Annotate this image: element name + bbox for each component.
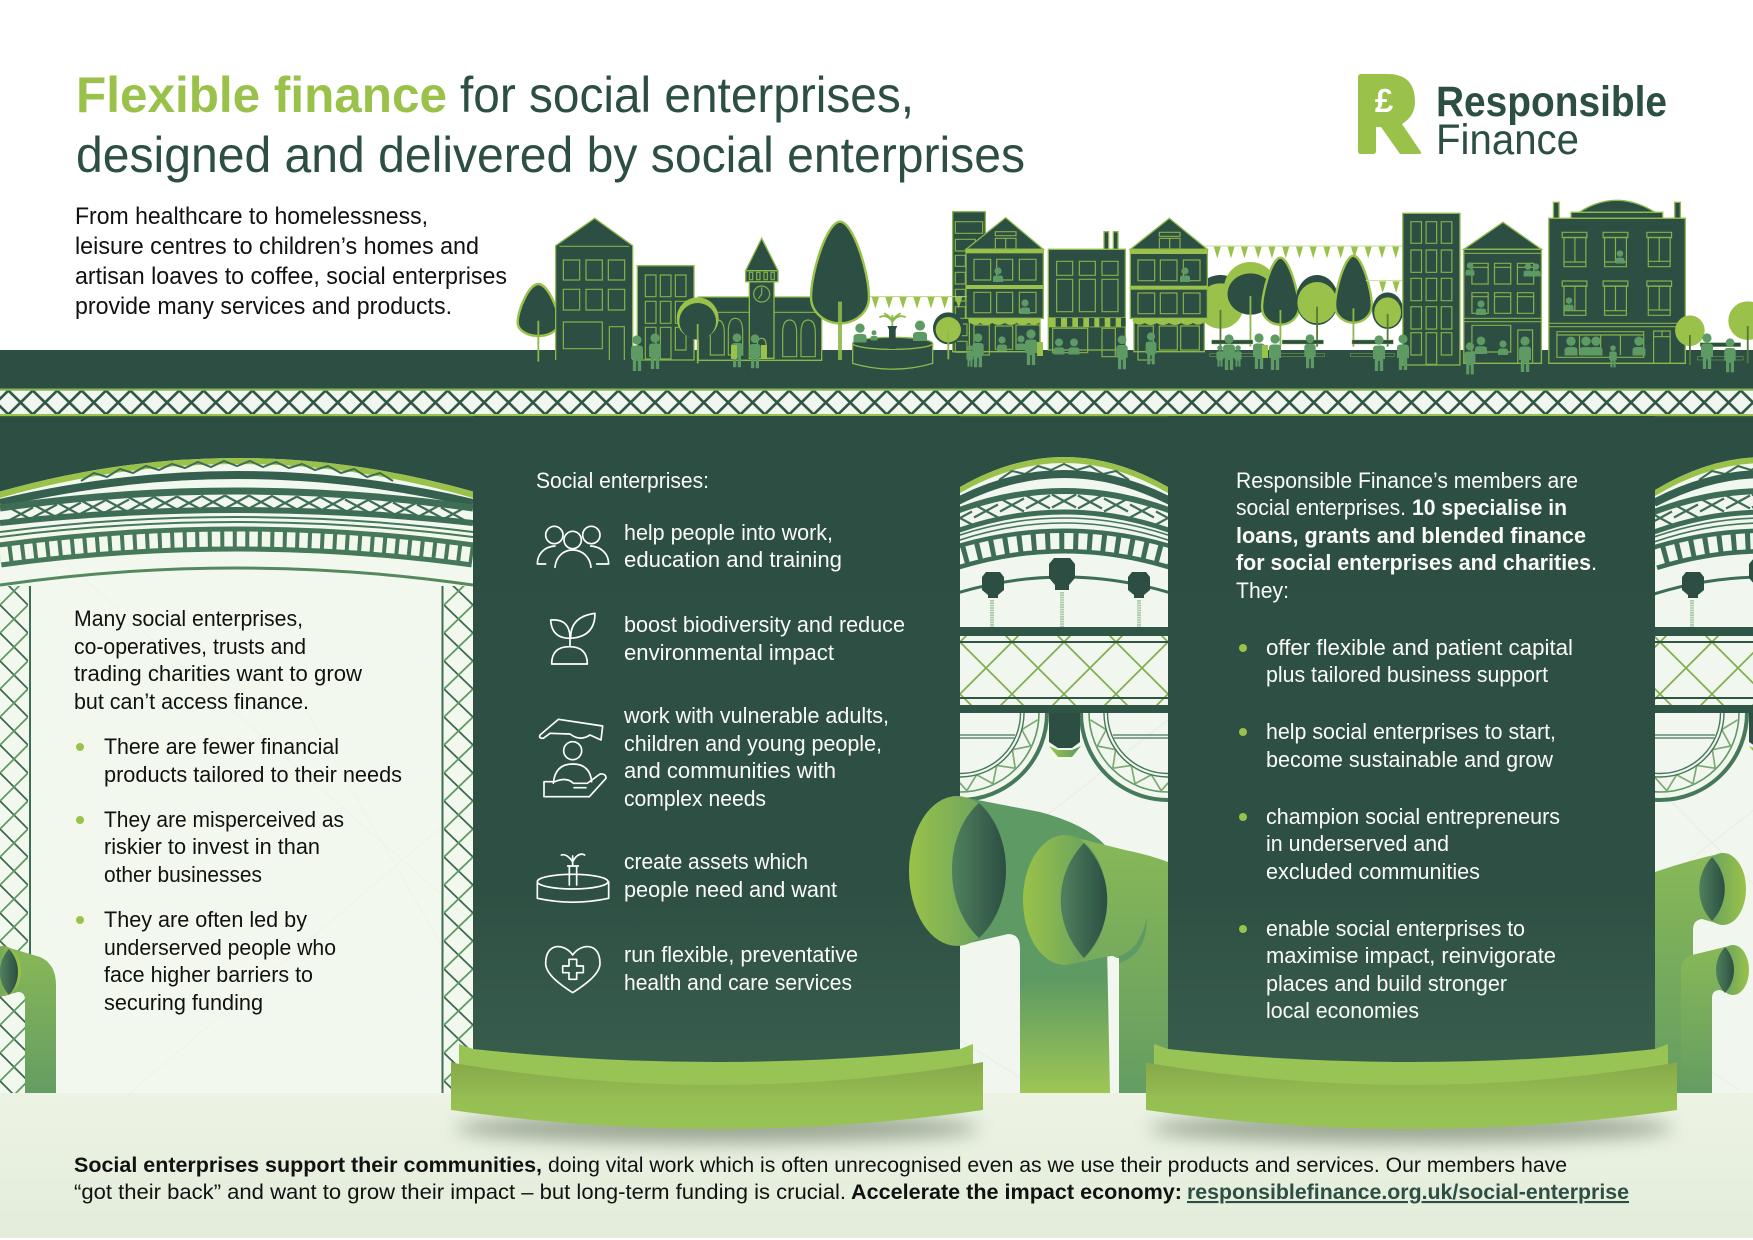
plinth: right column — [1146, 1044, 1677, 1143]
list item: assets: people need and want — [624, 877, 837, 902]
bullet list: barriers: There are fewer financial — [104, 734, 339, 759]
lattice frieze band — [0, 388, 1753, 416]
footer text: Accelerate the impact economy: — [851, 1181, 1182, 1204]
list item: work and training: help people into work, — [624, 520, 833, 545]
tall block — [1403, 213, 1460, 365]
house with shopfront right — [1130, 218, 1207, 360]
text block: members intro: . — [1591, 550, 1597, 575]
text block: members intro: loans, grants and blended finance — [1236, 523, 1586, 548]
text block: members intro: social enterprises. — [1236, 495, 1406, 520]
intro text: provide many services and products. — [75, 293, 452, 320]
text block: members intro: 10 specialise in — [1412, 495, 1567, 520]
intro text: leisure centres to children’s homes and — [75, 233, 479, 260]
panel: middle arch structure — [960, 457, 1168, 1093]
bullet list: barriers: products tailored to their needs — [104, 762, 402, 787]
list item: vulnerable people: work with vulnerable adults, — [623, 703, 889, 728]
bullet list: what members do: excluded communities — [1266, 859, 1480, 884]
dark ground and body background — [0, 350, 1753, 1093]
logo: Responsible Finance: £ — [1375, 82, 1394, 119]
town people — [631, 250, 1736, 374]
list item: biodiversity: environmental impact — [624, 640, 834, 665]
lattice column right — [444, 586, 473, 1093]
icon: periscope pipe at left edge — [0, 946, 56, 1093]
town illustration: bunting and tree by fountain — [870, 297, 967, 359]
title: designed and delivered by social enterprises — [76, 127, 1025, 183]
benches — [1210, 340, 1743, 360]
intro text: From healthcare to homelessness, — [75, 203, 428, 230]
list item: biodiversity: boost biodiversity and reduce — [624, 612, 905, 637]
list item: work and training: education and training — [624, 547, 842, 572]
lattice column left — [0, 586, 28, 1093]
title: for social enterprises, — [460, 67, 914, 123]
text block: members intro — [1236, 468, 1597, 603]
tall block behind houses — [953, 212, 985, 352]
icon: periscope pipes at right edge — [1655, 853, 1749, 1093]
bullet list: what members do: places and build stronger — [1266, 971, 1507, 996]
intro text: artisan loaves to coffee, social enterprises — [75, 263, 507, 290]
text block: social enterprises list heading: Social enterprises: — [536, 468, 709, 493]
text block: members intro: Responsible Finance’s members are — [1236, 468, 1578, 493]
bullet list: what members do: plus tailored business support — [1266, 662, 1548, 687]
bunting — [870, 297, 967, 309]
list item: health and care — [546, 942, 858, 995]
logo: Responsible Finance: Responsible — [1436, 78, 1667, 126]
flat block — [637, 266, 694, 360]
title — [76, 67, 1025, 183]
bullet list: what members do: offer flexible and patient capital — [1266, 635, 1573, 660]
panel: right arch structure — [1655, 457, 1753, 1093]
bullet list: what members do: champion social entrepreneurs — [1266, 804, 1560, 829]
list item: vulnerable people: complex needs — [624, 786, 766, 811]
panel: middle dark column background — [473, 416, 960, 1093]
bullet list: what members do: become sustainable and grow — [1266, 747, 1553, 772]
bullet list: barriers: underserved people who — [104, 935, 336, 960]
text block: left column: trading charities want to grow — [74, 661, 362, 686]
list item: vulnerable people — [540, 703, 889, 811]
town illustration: high street houses — [940, 200, 1207, 360]
bullet list: what members do: local economies — [1266, 998, 1419, 1023]
bullet list: barriers: other businesses — [104, 862, 262, 887]
tree: tall — [811, 222, 869, 360]
bullet list: what members do — [1239, 635, 1573, 1023]
bullet list: barriers: They are misperceived as — [104, 807, 344, 832]
text block: left column — [74, 606, 402, 1015]
text block: members intro: for social enterprises and charities — [1236, 550, 1591, 575]
arch top green rim — [0, 458, 473, 498]
plinth: middle column — [451, 1044, 983, 1143]
footer text: responsiblefinance.org.uk/social-enterprise — [1187, 1181, 1629, 1204]
fountain — [853, 313, 933, 369]
list item: work and training — [537, 520, 842, 572]
footer text: doing vital work which is often unrecognised even as we use their products and services. Our members have — [548, 1154, 1567, 1177]
logo: Responsible Finance — [1358, 74, 1667, 164]
bullet list: barriers: riskier to invest in than — [104, 834, 320, 859]
footer text: Social enterprises support their communities, — [74, 1154, 542, 1177]
bullet list: what members do: enable social enterprises to — [1266, 916, 1525, 941]
text block: left column: but can’t access finance. — [74, 689, 309, 714]
town hall with clock tower — [698, 238, 822, 360]
footer text — [74, 1154, 1629, 1204]
list item: assets — [537, 849, 837, 902]
panel: right dark column background — [1168, 416, 1655, 1093]
text block: left column: co-operatives, trusts and — [74, 634, 306, 659]
list item: biodiversity — [551, 612, 905, 665]
footer text: “got their back” and want to grow their impact – but long-term funding is crucial. — [74, 1181, 846, 1204]
title: Flexible finance — [76, 67, 447, 123]
intro text — [75, 203, 507, 320]
tree cluster — [1195, 256, 1403, 347]
house with shopfront — [966, 218, 1043, 355]
text block: left column: Many social enterprises, — [74, 606, 303, 631]
bullet list: barriers: securing funding — [104, 990, 263, 1015]
list item: assets: create assets which — [624, 849, 808, 874]
domed building — [1549, 200, 1685, 364]
bullet list: what members do: maximise impact, reinvigorate — [1266, 943, 1556, 968]
list item: vulnerable people: children and young people, — [624, 731, 882, 756]
footer band — [0, 1093, 1753, 1238]
text block: members intro: They: — [1236, 578, 1289, 603]
bullet list: barriers: They are often led by — [104, 907, 307, 932]
panel: left arch with text background — [0, 458, 473, 1093]
list item: vulnerable people: and communities with — [624, 758, 836, 783]
list item: health and care: health and care services — [624, 970, 852, 995]
flat house with striped awning — [940, 200, 1125, 357]
icon: periscope pipes in middle opening — [909, 796, 1168, 1093]
list item: health and care: run flexible, preventative — [624, 942, 858, 967]
tree: small round green — [933, 312, 964, 359]
bullet list: what members do: in underserved and — [1266, 831, 1449, 856]
logo: Responsible Finance: Finance — [1436, 116, 1579, 164]
arch bands — [0, 475, 473, 585]
tree: small left — [518, 284, 559, 362]
bullet list: what members do: help social enterprises to start, — [1266, 719, 1556, 744]
bullet list: barriers — [76, 734, 402, 1015]
pitched house — [1464, 222, 1541, 363]
town illustration: left section — [518, 218, 933, 369]
right trees — [1675, 301, 1753, 365]
town illustration: right section — [1195, 200, 1753, 365]
bunting — [1200, 246, 1403, 293]
bullet list: barriers: face higher barriers to — [104, 962, 313, 987]
tree: round — [677, 297, 719, 363]
house with pitched roof — [556, 218, 633, 360]
